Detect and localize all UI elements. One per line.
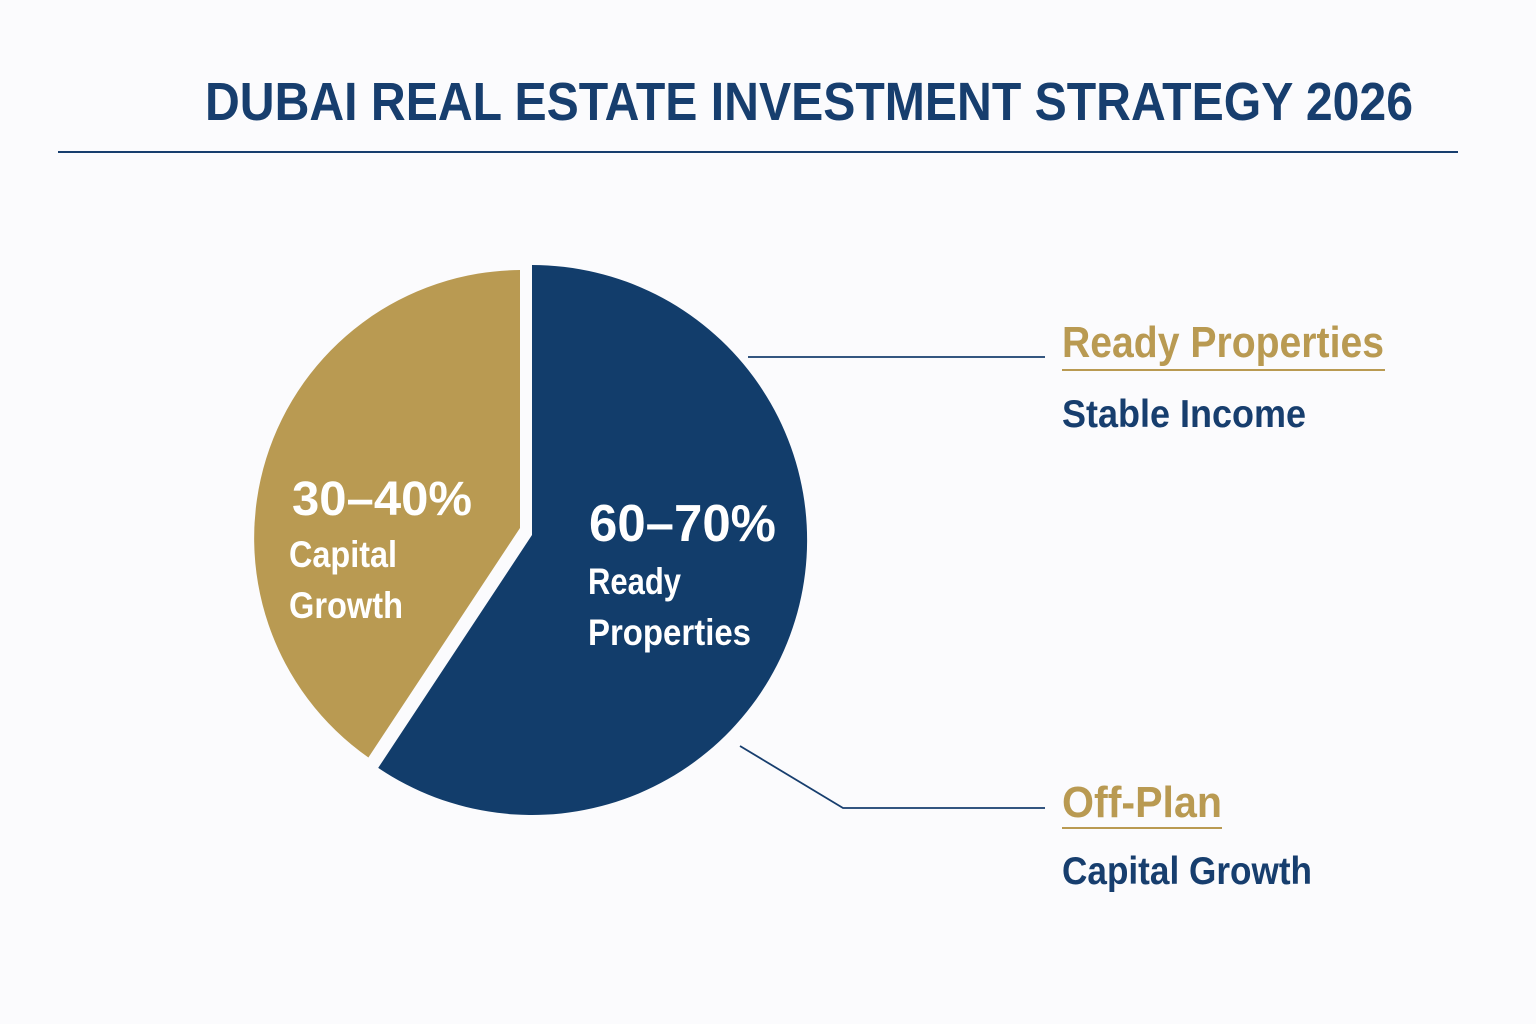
callout: ready properties: Stable Income xyxy=(1062,393,1306,436)
callout: off-plan xyxy=(1062,778,1312,893)
callout: off-plan: Capital Growth xyxy=(1062,850,1312,893)
title: DUBAI REAL ESTATE INVESTMENT STRATEGY 2026 xyxy=(205,72,1413,132)
label: 30-40%: Capital xyxy=(289,534,397,575)
label: 30-40% xyxy=(289,473,472,626)
slice: capital growth xyxy=(254,270,520,758)
leader line: off-plan xyxy=(740,746,1045,808)
label: 60-70%: Properties xyxy=(588,612,751,653)
pie chart xyxy=(254,265,807,815)
label: 30-40%: Growth xyxy=(289,585,403,626)
leader line: ready properties xyxy=(748,356,1045,358)
label: 60-70%: 60–70% xyxy=(589,495,776,553)
callout: off-plan: Off-Plan xyxy=(1062,778,1222,827)
label: 30-40%: 30–40% xyxy=(292,473,472,526)
slice: ready properties xyxy=(378,265,807,815)
callout: ready properties: Ready Properties xyxy=(1062,318,1384,367)
callout: ready properties xyxy=(1062,318,1385,436)
label: 60-70%: Ready xyxy=(588,561,681,602)
label: 60-70% xyxy=(588,495,776,653)
